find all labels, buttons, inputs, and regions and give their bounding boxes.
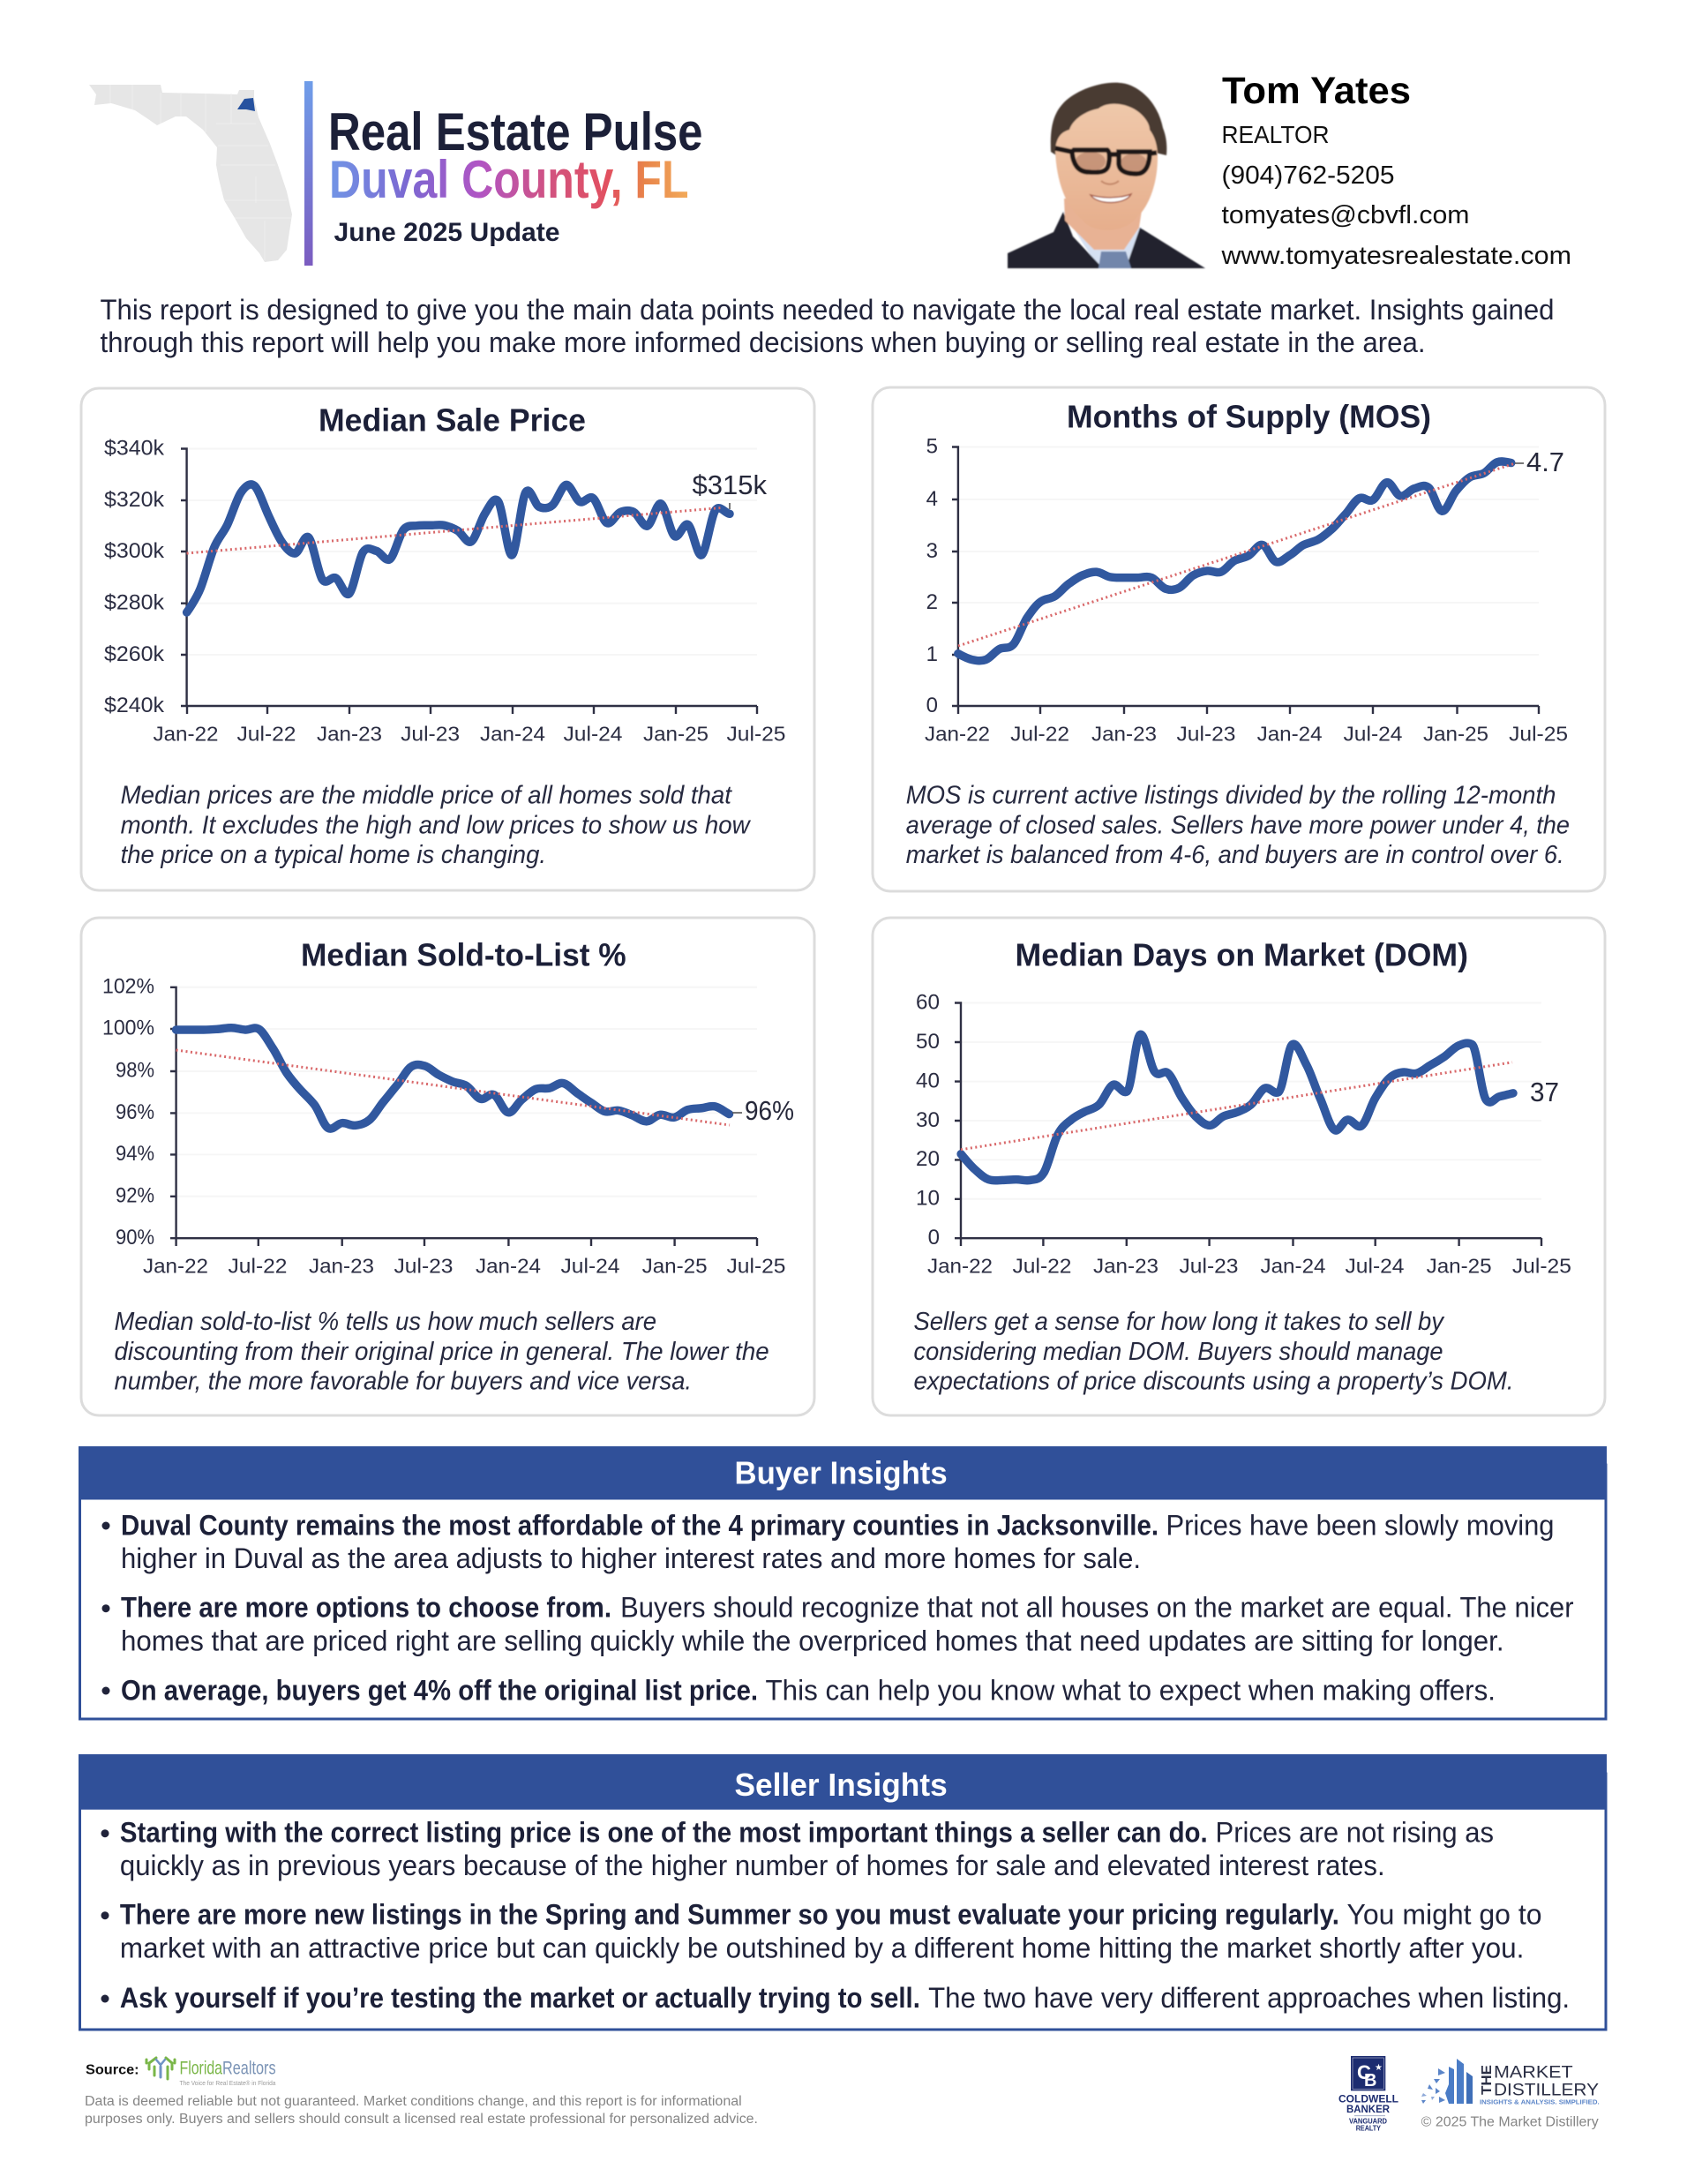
copyright: © 2025 The Market Distillery: [1421, 2114, 1599, 2129]
insight 2: Buyers should recognize that not all houses on the market are equal. The nicer: [620, 1592, 1574, 1624]
insight 2: [101, 1899, 1542, 1964]
line chart: sold-to-list: 96%: [116, 1100, 154, 1124]
icon: Duval County highlight: [237, 98, 255, 111]
line chart: months of supply: Jul-23: [1177, 722, 1235, 745]
line chart: days on market: Jul-24: [1345, 1255, 1405, 1278]
line chart: months of supply: 2: [926, 590, 938, 614]
panel: Median Sale Price: [81, 388, 814, 890]
line chart: sold-to-list: Jul-23: [394, 1255, 454, 1278]
logo: The Market Distillery: INSIGHTS & ANALYSIS. SIMPLIFIED.: [1480, 2098, 1600, 2105]
line chart: days on market: 50: [916, 1030, 940, 1054]
insight 1: quickly as in previous years because of the higher number of homes for sale and elevated interest rates.: [120, 1850, 1385, 1881]
panel: Median Days on Market: [873, 918, 1605, 1415]
line chart: months of supply: 4.7: [1526, 447, 1564, 477]
agent role: REALTOR: [1221, 121, 1329, 148]
description: MOS is current active listings divided by the rolling 12-month: [906, 781, 1556, 809]
footer: source and Florida Realtors logo: Florida: [180, 2059, 222, 2079]
line chart: median sale price: $280k: [104, 591, 165, 614]
footer: disclaimer: Data is deemed reliable but not guaranteed. Market conditions change, and this report is for informational: [85, 2094, 742, 2109]
smile: [1091, 194, 1131, 203]
panel: Buyer Insights: [79, 1446, 1607, 1719]
line chart: sold-to-list: 98%: [116, 1059, 154, 1082]
logo: The Market Distillery: [1421, 2059, 1600, 2129]
description: month. It excludes the high and low prices to show us how: [121, 812, 752, 840]
logo: Coldwell Banker Vanguard Realty: C: [1357, 2061, 1371, 2083]
line chart: days on market: Jan-25: [1427, 1255, 1492, 1278]
line chart: median sale price: Jan-25: [643, 722, 709, 745]
line chart: days on market: 40: [916, 1069, 940, 1092]
insight 2: [102, 1592, 1574, 1657]
description: market is balanced from 4-6, and buyers are in control over 6.: [906, 841, 1564, 869]
line chart: days on market: 60: [916, 990, 940, 1015]
line chart: sold-to-list: 100%: [102, 1017, 154, 1039]
subtitle: Duval County, FL: Duval County, FL: [329, 150, 688, 209]
line chart: median sale price: Jul-24: [563, 722, 623, 745]
line chart: median sale price: $320k: [104, 488, 165, 512]
logo: Coldwell Banker Vanguard Realty: ★: [1375, 2063, 1383, 2073]
footer: source and Florida Realtors logo: [86, 2058, 276, 2087]
insight 2: market with an attractive price but can quickly be outshined by a different home hitting the market shortly after you.: [120, 1933, 1524, 1964]
line chart: days on market: 0: [928, 1226, 940, 1250]
line chart: median sale price: Jul-23: [401, 722, 460, 745]
line chart: months of supply: 3: [926, 539, 938, 563]
insight 2: homes that are priced right are selling quickly while the overpriced homes that need updates are sitting for longer.: [121, 1625, 1503, 1657]
intro text: [101, 294, 1555, 358]
line chart: months of supply: 5: [926, 434, 938, 459]
heading: Months of Supply (MOS): [1067, 399, 1431, 435]
line chart: months of supply: 4: [926, 487, 938, 511]
line chart: sold-to-list: Jul-22: [228, 1255, 288, 1278]
panel: Months of Supply: [873, 387, 1605, 891]
line chart: days on market: [916, 990, 1571, 1278]
description: [906, 781, 1570, 869]
line chart: days on market: 30: [916, 1108, 940, 1132]
logo: Coldwell Banker Vanguard Realty: [1338, 2056, 1398, 2133]
line chart: months of supply: [925, 434, 1568, 745]
heading: Median Sold-to-List %: [301, 937, 626, 973]
line chart: median sale price: [104, 436, 785, 745]
line chart: months of supply: Jul-25: [1509, 722, 1568, 745]
description: considering median DOM. Buyers should manage: [914, 1338, 1443, 1366]
insight 1: Duval County remains the most affordable of the 4 primary counties in Jacksonville.: [121, 1509, 1158, 1541]
insight 1: [102, 1509, 1555, 1574]
line chart: median sale price: Jul-25: [727, 722, 785, 745]
footer: disclaimer: [85, 2094, 758, 2127]
description: [121, 781, 752, 869]
heading: Seller Insights: [734, 1767, 948, 1803]
date: June 2025 Update: June 2025 Update: [334, 218, 559, 247]
panel: Median Sold-to-List %: [81, 918, 814, 1415]
insight 1: higher in Duval as the area adjusts to higher interest rates and more homes for sale.: [121, 1542, 1141, 1574]
logo: The Market Distillery: THE: [1480, 2065, 1495, 2095]
logo: Coldwell Banker Vanguard Realty: COLDWELL: [1338, 2095, 1398, 2105]
insight 3: This can help you know what to expect when making offers.: [766, 1675, 1496, 1707]
glasses: [1055, 148, 1157, 174]
line chart: median sale price: $340k: [104, 436, 165, 461]
panel: Seller Insights: [79, 1754, 1607, 2030]
insight 3: [101, 1982, 1570, 2014]
description: expectations of price discounts using a property’s DOM.: [914, 1367, 1514, 1395]
line chart: months of supply: Jan-23: [1091, 722, 1157, 745]
insight 2: There are more options to choose from.: [121, 1592, 611, 1624]
line chart: months of supply: 1: [926, 642, 938, 666]
description: average of closed sales. Sellers have more power under 4, the: [906, 812, 1570, 840]
line chart: months of supply: Jan-24: [1257, 722, 1323, 745]
heading: Median Sale Price: [319, 402, 586, 438]
description: discounting from their original price in general. The lower the: [115, 1338, 769, 1366]
header: Florida map: [89, 85, 292, 262]
description: [115, 1308, 769, 1395]
insight 1: Prices have been slowly moving: [1166, 1509, 1555, 1541]
insight 3: [102, 1675, 1496, 1707]
description: the price on a typical home is changing.: [121, 841, 546, 869]
description: number, the more favorable for buyers and vice versa.: [115, 1367, 692, 1395]
line chart: median sale price: Jan-24: [480, 722, 545, 745]
logo: Coldwell Banker Vanguard Realty: VANGUARD: [1349, 2118, 1387, 2126]
line chart: sold-to-list: Jul-25: [727, 1255, 785, 1278]
line chart: median sale price: Jan-23: [317, 722, 382, 745]
description: Median sold-to-list % tells us how much sellers are: [115, 1308, 656, 1336]
line chart: sold-to-list: [102, 974, 794, 1278]
agent name: Tom Yates: [1222, 70, 1411, 112]
line chart: months of supply: Jan-22: [925, 722, 990, 745]
icon: Florida Realtors house: [146, 2058, 175, 2079]
line chart: days on market: Jul-23: [1179, 1255, 1239, 1278]
icon: buildings and shards: [1421, 2059, 1473, 2104]
line chart: sold-to-list: 90%: [116, 1226, 154, 1250]
line chart: sold-to-list: Jul-24: [561, 1255, 620, 1278]
title: Real Estate Pulse: Real Estate Pulse: [328, 102, 702, 161]
line chart: median sale price: Jul-22: [236, 722, 296, 745]
line chart: days on market: Jan-22: [927, 1255, 993, 1278]
logo: The Market Distillery: DISTILLERY: [1494, 2081, 1599, 2099]
logo: Coldwell Banker Vanguard Realty: B: [1364, 2071, 1376, 2090]
heading: Buyer Insights: [734, 1455, 948, 1491]
line chart: months of supply: 0: [926, 694, 938, 717]
line chart: sold-to-list: 102%: [102, 974, 154, 999]
line chart: days on market: 10: [916, 1186, 940, 1211]
description: Sellers get a sense for how long it takes to sell by: [914, 1308, 1444, 1336]
agent portrait: [1008, 83, 1205, 268]
line chart: days on market: Jan-23: [1093, 1255, 1158, 1278]
website: www.tomyatesrealestate.com: [1220, 242, 1571, 270]
line chart: median sale price: $315k: [692, 469, 767, 500]
insight 3: Ask yourself if you’re testing the market or actually trying to sell.: [120, 1982, 920, 2014]
line chart: days on market: 20: [916, 1147, 940, 1171]
insight 3: The two have very different approaches when listing.: [928, 1982, 1570, 2014]
footer: source and Florida Realtors logo: The Voice for Real Estate® in Florida: [180, 2079, 276, 2087]
logo: Coldwell Banker Vanguard Realty: BANKER: [1346, 2105, 1391, 2115]
line chart: sold-to-list: Jan-25: [642, 1255, 708, 1278]
logo: Coldwell Banker Vanguard Realty: REALTY: [1356, 2125, 1382, 2133]
phone: (904)762-5205: [1221, 161, 1394, 190]
title block: [328, 102, 702, 247]
agent contact details: [1220, 70, 1571, 270]
footer: disclaimer: purposes only. Buyers and sellers should consult a licensed real estate professional for personalized advice.: [85, 2112, 758, 2127]
line chart: sold-to-list: 94%: [116, 1142, 154, 1166]
intro text: through this report will help you make more informed decisions when buying or selling real estate in the area.: [101, 326, 1426, 358]
line chart: sold-to-list: 92%: [116, 1184, 154, 1207]
logo: The Market Distillery: MARKET: [1494, 2063, 1573, 2082]
intro text: This report is designed to give you the main data points needed to navigate the local real estate market. Insights gained: [101, 294, 1555, 326]
line chart: median sale price: $240k: [104, 694, 165, 717]
decorative gradient bar: [304, 81, 312, 266]
line chart: months of supply: Jul-22: [1010, 722, 1069, 745]
line chart: days on market: 37: [1530, 1077, 1559, 1107]
line chart: days on market: Jul-25: [1512, 1255, 1571, 1278]
line chart: sold-to-list: Jan-24: [476, 1255, 541, 1278]
email: tomyates@cbvfl.com: [1221, 201, 1470, 229]
insight 2: There are more new listings in the Spring and Summer so you must evaluate your pricing regularly.: [120, 1899, 1339, 1931]
footer: source and Florida Realtors logo: Source:: [86, 2063, 139, 2078]
line chart: sold-to-list: Jan-23: [309, 1255, 374, 1278]
line chart: median sale price: Jan-22: [154, 722, 219, 745]
insight 1: Prices are not rising as: [1216, 1816, 1494, 1848]
line chart: sold-to-list: 96%: [745, 1095, 794, 1126]
line chart: months of supply: Jul-24: [1343, 722, 1403, 745]
insight 1: Starting with the correct listing price is one of the most important things a seller can do.: [120, 1816, 1208, 1848]
description: [914, 1308, 1514, 1395]
insight 1: [101, 1816, 1494, 1881]
line chart: days on market: Jul-22: [1013, 1255, 1071, 1278]
line chart: sold-to-list: Jan-22: [143, 1255, 208, 1278]
insight 3: On average, buyers get 4% off the original list price.: [121, 1675, 758, 1707]
line chart: median sale price: $260k: [104, 642, 165, 666]
line chart: months of supply: Jan-25: [1423, 722, 1488, 745]
insight 2: You might go to: [1346, 1899, 1542, 1931]
heading: Median Days on Market (DOM): [1015, 937, 1468, 973]
footer: source and Florida Realtors logo: Realtors: [222, 2059, 276, 2079]
description: Median prices are the middle price of all homes sold that: [121, 781, 733, 809]
line chart: days on market: Jan-24: [1260, 1255, 1326, 1278]
line chart: median sale price: $300k: [104, 539, 165, 563]
